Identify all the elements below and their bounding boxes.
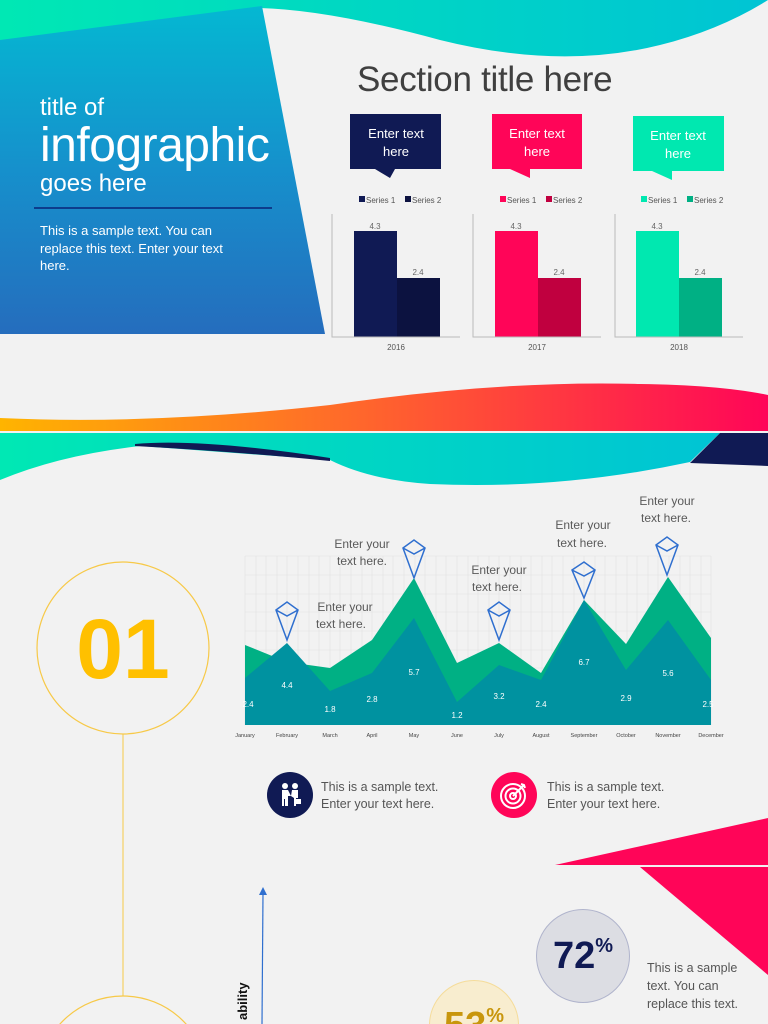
chart 2017: 2.4 [553,268,565,277]
area chart: 5.6 [662,669,674,678]
title block: title of [40,94,104,121]
chart 2018: Enter text [650,128,706,143]
circle 01 with timeline [36,561,210,1024]
chart 2017 [473,114,601,352]
stat: 72%: 72% [553,935,613,977]
area chart: Enter your [555,518,611,532]
area chart: July [494,733,504,739]
chart 2018: 4.3 [651,222,663,231]
area chart: 2.9 [620,694,632,703]
intro text: This is a sample text. You can replace this text. Enter your text here. [40,223,223,273]
area chart: April [366,733,378,739]
title block: goes here [40,170,147,197]
chart 2016: here [383,144,409,159]
area chart: Enter your [334,537,390,551]
chart 2017: 4.3 [510,222,522,231]
chart 2018: 2018 [670,343,688,352]
chart 2018: 2.4 [694,268,706,277]
chart 2018: Series 1 [648,196,678,205]
area chart: text here. [641,511,691,525]
chart 2017: Enter text [509,126,565,141]
top teal wave [0,0,768,56]
chart 2016: 4.3 [369,222,381,231]
chart 2016: Series 2 [412,196,442,205]
text: icon 2: This is a sample text. [547,780,664,794]
area chart [235,494,724,739]
area chart: Enter your [471,563,527,577]
area chart: 3.2 [493,692,505,701]
area chart: 4.4 [281,681,293,690]
area chart: 1.8 [324,705,336,714]
area chart: June [451,733,463,739]
area chart: text here. [337,554,387,568]
chart 2018: Series 2 [694,196,724,205]
chart 2018: here [665,146,691,161]
title block: infographic [40,119,269,172]
area chart: October [616,733,636,739]
chart 2017: Series 2 [553,196,583,205]
area chart: 5.7 [408,668,420,677]
stat text: This is a sample text. You can replace this text. [647,961,738,1011]
bar charts [332,114,743,352]
area chart: December [698,733,724,739]
blue title panel [0,6,325,334]
area chart: 1.2 [451,711,463,720]
chart 2016 [332,114,460,352]
text: icon 1: This is a sample text. [321,780,438,794]
chart 2018 [615,116,743,352]
area chart: text here. [472,580,522,594]
area chart: Enter your [639,494,695,508]
area chart: May [409,733,419,739]
y-axis arrow with label: ability [235,982,250,1020]
area chart: text here. [557,536,607,550]
area chart: 6.7 [578,658,590,667]
y-axis arrow with label [235,887,267,1024]
chart 2017: Series 1 [507,196,537,205]
bottom orange-red wave [0,383,768,431]
chart 2016: 2.4 [412,268,424,277]
second teal band [0,433,720,485]
area chart: 2.4 [535,700,547,709]
area chart: 2.8 [366,695,378,704]
area chart: 2.5 [702,700,714,709]
area chart: January [235,733,255,739]
chart 2016: Enter text [368,126,424,141]
area chart: February [276,733,298,739]
text: icon 1 [321,780,438,811]
pink triangles [555,818,768,865]
chart 2017: here [524,144,550,159]
text: icon 2 [547,780,664,811]
divider line [34,207,272,209]
area chart: 2.4 [242,700,254,709]
chart 2016: Series 1 [366,196,396,205]
circle 01 with timeline: 01 [76,602,170,696]
area chart: text here. [316,617,366,631]
icon: target [491,772,537,818]
icon: handshake [267,772,313,818]
stat: 72% [536,909,630,1003]
area chart: November [655,733,681,739]
chart 2017: 2017 [528,343,546,352]
area chart: March [322,733,338,739]
area chart: September [571,733,598,739]
title block [40,94,269,197]
area chart: August [532,733,550,739]
area chart: Enter your [317,600,373,614]
section title: Section title here [357,60,612,99]
text: icon 1: Enter your text here. [321,797,434,811]
chart 2016: 2016 [387,343,405,352]
text: icon 2: Enter your text here. [547,797,660,811]
stat: 53% [429,980,519,1024]
